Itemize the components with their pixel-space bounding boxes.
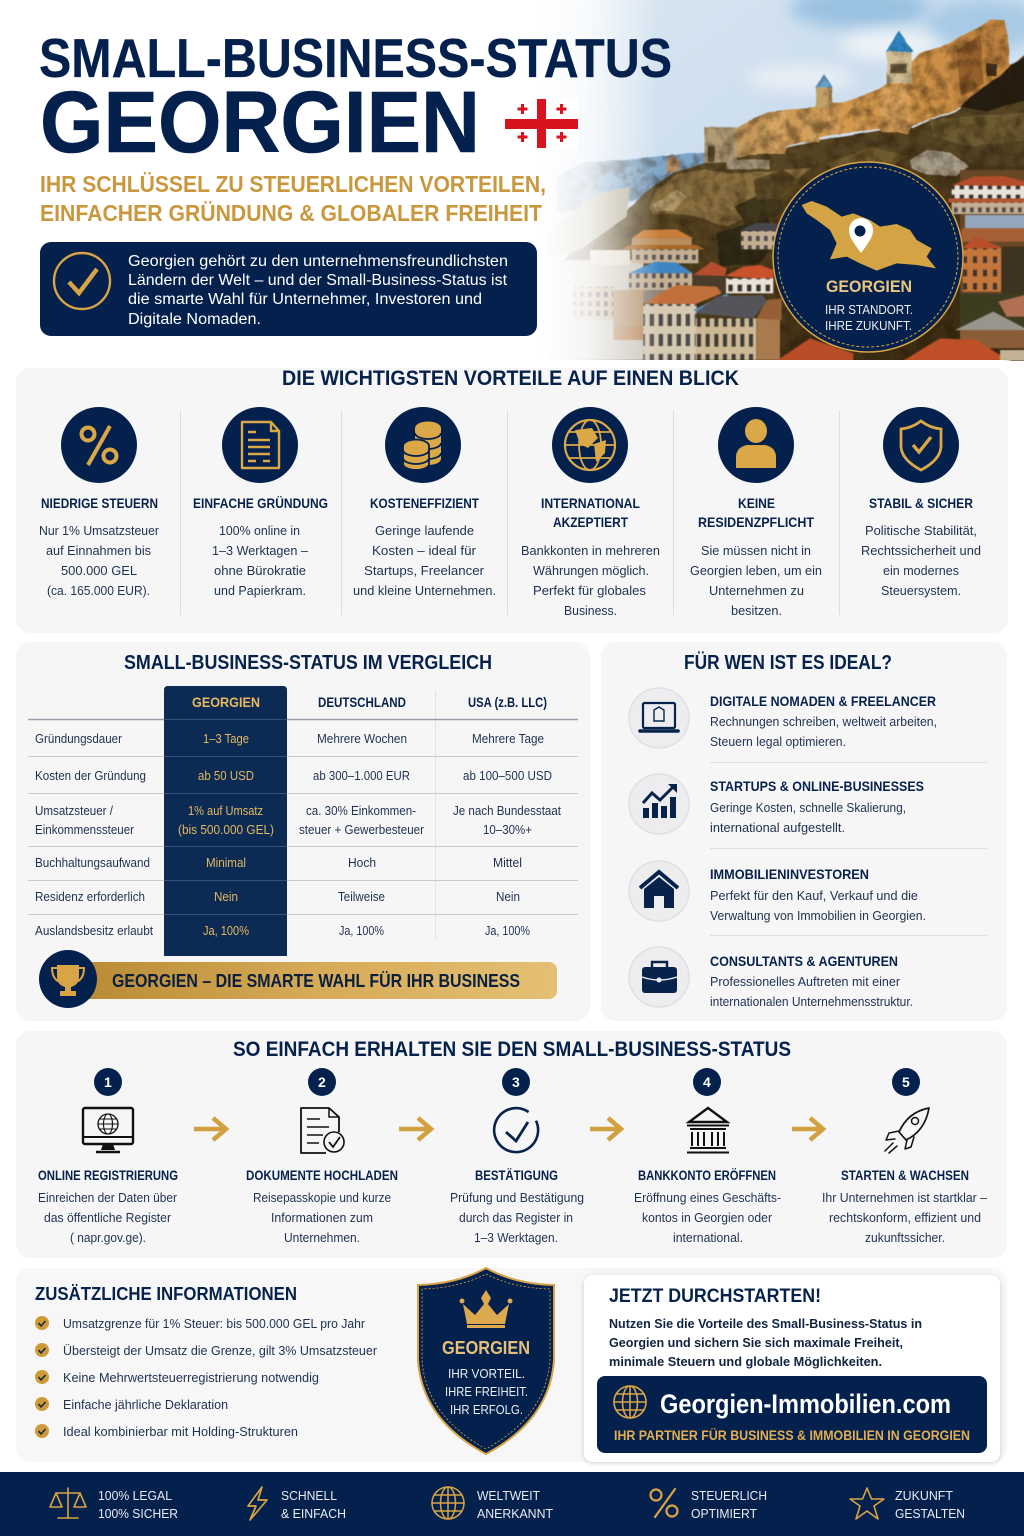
item: real estate investors: Verwaltung von Immobilien in Georgien.	[710, 908, 926, 923]
heading: advantages: DIE WICHTIGSTEN VORTEILE AUF EINEN BLICK	[282, 367, 739, 390]
item: stable and secure: Rechtssicherheit und	[861, 543, 981, 558]
column: USA: USA (z.B. LLC)	[468, 695, 547, 710]
item: consultants: CONSULTANTS & AGENTUREN	[710, 953, 898, 969]
icon: globe	[432, 1487, 464, 1519]
icon: map of Georgia with pin	[802, 201, 936, 271]
badge: shield: IHR VORTEIL.	[448, 1366, 525, 1381]
item: no residency	[690, 407, 822, 618]
step 5: STARTEN & WACHSEN	[841, 1168, 969, 1183]
number 1	[94, 1068, 122, 1096]
row labels: Residenz erforderlich	[35, 890, 145, 904]
row labels: Kosten der Gründung	[35, 769, 146, 783]
column: Deutschland: Hoch	[348, 856, 376, 870]
column: USA: Ja, 100%	[485, 924, 530, 938]
item: cost efficient: KOSTENEFFIZIENT	[370, 495, 479, 511]
footer item: legal: 100% SICHER	[98, 1506, 178, 1521]
badge: shield: IHRE FREIHEIT.	[445, 1384, 528, 1399]
panel: target audience	[601, 642, 1007, 1021]
banner: smart choice: GEORGIEN – DIE SMARTE WAHL FÜR IHR BUSINESS	[112, 971, 520, 991]
column: USA: 10–30%+	[483, 823, 532, 837]
footer item: legal	[50, 1488, 178, 1521]
item: stable and secure: Steuersystem.	[881, 583, 961, 598]
number 3	[502, 1068, 530, 1096]
step 2: Reisepasskopie und kurze	[253, 1191, 391, 1205]
item: no residency: RESIDENZPFLICHT	[698, 514, 814, 530]
item: internationally accepted	[521, 407, 660, 618]
badge: shield: GEORGIEN	[442, 1338, 530, 1358]
column: Georgien highlighted: Nein	[214, 889, 238, 904]
number 2	[308, 1068, 336, 1096]
badge: shield: IHR ERFOLG.	[450, 1402, 523, 1417]
title: GEORGIEN: GEORGIEN	[40, 74, 480, 171]
icon: circle check	[494, 1108, 538, 1152]
step 2	[246, 1068, 398, 1245]
item: consultants	[629, 947, 913, 1009]
row labels: Einkommenssteuer	[35, 823, 134, 837]
icon: Georgian flag	[505, 99, 578, 148]
badge: shield	[418, 1268, 554, 1454]
icon: monitor with globe	[83, 1108, 133, 1152]
column: USA: Nein	[496, 890, 520, 904]
column: USA	[453, 695, 561, 938]
panel: process steps	[16, 1031, 1007, 1258]
item: startups: STARTUPS & ONLINE-BUSINESSES	[710, 778, 924, 794]
fortress	[705, 20, 1010, 163]
icon: briefcase	[629, 947, 689, 1007]
call to action text: Nutzen Sie die Vorteile des Small-Business-Status in	[609, 1316, 922, 1331]
step 4	[634, 1068, 781, 1245]
icon: trophy	[39, 950, 97, 1008]
item: simple formation: ohne Bürokratie	[214, 563, 306, 578]
row labels	[35, 732, 153, 938]
step 5	[822, 1068, 987, 1245]
badge: Georgien map: IHR STANDORT.	[825, 303, 913, 317]
step 1: das öffentliche Register	[44, 1211, 171, 1225]
footer item: future: GESTALTEN	[895, 1506, 965, 1521]
card: call to action	[584, 1275, 1000, 1462]
step 4: BANKKONTO ERÖFFNEN	[638, 1168, 776, 1183]
step 4: Eröffnung eines Geschäfts-	[634, 1191, 781, 1205]
step 1: ONLINE REGISTRIERUNG	[38, 1168, 178, 1183]
number 5: 5	[902, 1074, 910, 1090]
icon: house	[629, 861, 689, 921]
intro text: Ländern der Welt – und der Small-Business-Status ist	[128, 272, 508, 289]
badge: Georgien map	[773, 162, 963, 352]
badge: Georgien map: IHRE ZUKUNFT.	[825, 319, 912, 333]
item: startups: international aufgestellt.	[710, 820, 845, 835]
step 1: Einreichen der Daten über	[38, 1191, 177, 1205]
intro text: Georgien gehört zu den unternehmensfreundlichsten	[128, 253, 508, 270]
arrow 3	[590, 1118, 621, 1140]
item: stable and secure	[861, 407, 981, 598]
footer item: worldwide	[432, 1487, 553, 1521]
item: internationally accepted: INTERNATIONAL	[541, 495, 640, 511]
column: Georgien highlighted: Minimal	[206, 855, 246, 870]
step 1	[38, 1068, 178, 1245]
item: cost efficient: Startups, Freelancer	[364, 563, 485, 578]
item: no residency: Georgien leben, um ein	[690, 563, 822, 578]
item: digital nomads: DIGITALE NOMADEN & FREELANCER	[710, 693, 936, 709]
item: no residency: KEINE	[738, 495, 775, 511]
column: Deutschland: DEUTSCHLAND	[318, 695, 406, 710]
item: no residency: Unternehmen zu	[709, 583, 804, 598]
call to action text: minimale Steuern und globale Möglichkeiten.	[609, 1354, 882, 1369]
number 2: 2	[318, 1074, 326, 1090]
item: consultants: Professionelles Auftreten mit einer	[710, 974, 901, 989]
step 2: Informationen zum	[271, 1211, 373, 1225]
item: internationally accepted: AKZEPTIERT	[553, 514, 628, 530]
heading: process: SO EINFACH ERHALTEN SIE DEN SMALL-BUSINESS-STATUS	[233, 1038, 791, 1061]
arrow 4	[792, 1118, 823, 1140]
item: digital nomads	[629, 688, 937, 749]
row labels: Gründungsdauer	[35, 732, 122, 746]
icon: laptop	[629, 688, 689, 748]
step 1: ( napr.gov.ge).	[70, 1231, 146, 1245]
column: Deutschland	[299, 695, 424, 938]
column: USA: ab 100–500 USD	[463, 769, 552, 783]
website box: Georgien-Immobilien.com	[660, 1389, 951, 1419]
item: stable and secure: Politische Stabilität,	[865, 523, 977, 538]
column: Deutschland: ab 300–1.000 EUR	[313, 769, 410, 783]
item: no residency: besitzen.	[731, 603, 782, 618]
column: Georgien highlighted	[164, 686, 287, 956]
website box: IHR PARTNER FÜR BUSINESS & IMMOBILIEN IN GEORGIEN	[614, 1428, 970, 1443]
step 5: zukunftssicher.	[865, 1231, 945, 1245]
call to action text: Georgien und sichern Sie sich maximale Freiheit,	[609, 1335, 903, 1350]
heading: comparison: SMALL-BUSINESS-STATUS IM VERGLEICH	[124, 652, 492, 674]
heading: call to action: JETZT DURCHSTARTEN!	[609, 1285, 821, 1307]
panel: comparison	[16, 642, 590, 1021]
step 3: BESTÄTIGUNG	[475, 1168, 558, 1183]
row labels: Auslandsbesitz erlaubt	[35, 924, 153, 938]
step 2: DOKUMENTE HOCHLADEN	[246, 1168, 398, 1183]
item: low taxes: (ca. 165.000 EUR).	[47, 583, 150, 598]
panel: advantages	[16, 367, 1008, 633]
item: stable and secure: ein modernes	[883, 563, 959, 578]
item: simple formation	[193, 407, 328, 598]
item: digital nomads: Rechnungen schreiben, weltweit arbeiten,	[710, 714, 937, 729]
item: low taxes: 500.000 GEL	[61, 563, 137, 578]
column: Deutschland: steuer + Gewerbesteuer	[299, 823, 424, 837]
badge: Georgien map: GEORGIEN	[826, 277, 912, 296]
step 4: kontos in Georgien oder	[642, 1211, 772, 1225]
icon: document with check	[301, 1108, 344, 1153]
heading: additional information: ZUSÄTZLICHE INFORMATIONEN	[35, 1284, 297, 1304]
list: additional information: Einfache jährliche Deklaration	[63, 1397, 228, 1412]
column: Georgien highlighted: (bis 500.000 GEL)	[178, 822, 274, 837]
item: cost efficient: Geringe laufende	[375, 523, 474, 538]
footer bar	[0, 1472, 1024, 1536]
call to action text	[609, 1316, 922, 1369]
icon: crown	[460, 1290, 512, 1328]
icon: document	[222, 407, 298, 483]
intro text: die smarte Wahl für Unternehmer, Investoren und	[128, 291, 482, 308]
table: comparison	[28, 686, 578, 956]
item: startups: Geringe Kosten, schnelle Skalierung,	[710, 800, 906, 815]
footer item: future	[850, 1488, 965, 1521]
item: real estate investors: Perfekt für den Kauf, Verkauf und die	[710, 888, 918, 903]
icon: check circle	[54, 253, 110, 309]
icon: percent	[650, 1489, 678, 1517]
footer item: legal: 100% LEGAL	[98, 1488, 172, 1503]
item: low taxes	[39, 407, 160, 598]
list: additional information: Umsatzgrenze für 1% Steuer: bis 500.000 GEL pro Jahr	[63, 1316, 366, 1331]
item: low taxes: auf Einnahmen bis	[46, 543, 151, 558]
arrow 2	[399, 1118, 431, 1140]
footer item: fast	[248, 1487, 346, 1521]
item: simple formation: und Papierkram.	[214, 583, 306, 598]
item: internationally accepted: Bankkonten in mehreren	[521, 543, 660, 558]
footer item: fast: SCHNELL	[281, 1488, 337, 1503]
step 4: international.	[673, 1231, 743, 1245]
item: low taxes: Nur 1% Umsatzsteuer	[39, 523, 160, 538]
icon: lightning	[248, 1487, 267, 1520]
number 3: 3	[512, 1074, 520, 1090]
arrow 1	[194, 1118, 226, 1140]
step 5: Ihr Unternehmen ist startklar –	[822, 1191, 987, 1205]
item: cost efficient	[353, 407, 496, 598]
item: digital nomads: Steuern legal optimieren.	[710, 734, 846, 749]
item: cost efficient: und kleine Unternehmen.	[353, 583, 496, 598]
number 4	[693, 1068, 721, 1096]
step 2: Unternehmen.	[284, 1231, 360, 1245]
heading: target audience: FÜR WEN IST ES IDEAL?	[684, 651, 892, 674]
item: real estate investors	[629, 861, 926, 923]
column: Georgien highlighted: Ja, 100%	[203, 923, 249, 938]
subtitle: IHR SCHLÜSSEL ZU STEUERLICHEN VORTEILEN,	[40, 171, 546, 197]
item: simple formation: 1–3 Werktagen –	[212, 543, 309, 558]
subtitle: EINFACHER GRÜNDUNG & GLOBALER FREIHEIT	[40, 200, 542, 226]
footer item: tax optimised	[650, 1488, 767, 1521]
white body background	[0, 360, 1024, 1536]
step 5: rechtskonform, effizient und	[829, 1211, 981, 1225]
number 5	[892, 1068, 920, 1096]
step 3	[450, 1068, 584, 1245]
item: real estate investors: IMMOBILIENINVESTOREN	[710, 866, 869, 882]
list: additional information: Keine Mehrwertsteuerregistrierung notwendig	[63, 1370, 319, 1385]
intro text: Digitale Nomaden.	[128, 311, 261, 328]
column: Georgien highlighted: 1% auf Umsatz	[188, 803, 263, 818]
column: Deutschland: ca. 30% Einkommen-	[306, 804, 416, 818]
item: simple formation: EINFACHE GRÜNDUNG	[193, 495, 328, 511]
icon: shield	[883, 407, 959, 483]
footer item: tax optimised: STEUERLICH	[691, 1488, 767, 1503]
item: internationally accepted: Währungen möglich.	[533, 563, 649, 578]
column: Deutschland: Ja, 100%	[339, 924, 384, 938]
town right	[960, 170, 1024, 297]
footer item: tax optimised: OPTIMIERT	[691, 1506, 757, 1521]
item: cost efficient: Kosten – ideal für	[372, 543, 477, 558]
town left, upper hazy area	[530, 187, 782, 361]
list: additional information: Ideal kombinierbar mit Holding-Strukturen	[63, 1424, 298, 1439]
icon: person	[718, 407, 794, 483]
column: Georgien highlighted: ab 50 USD	[198, 768, 254, 783]
intro text	[128, 253, 508, 328]
item: no residency: Sie müssen nicht in	[701, 543, 811, 558]
item: low taxes: NIEDRIGE STEUERN	[41, 495, 158, 511]
subtitle	[40, 171, 546, 226]
column: Georgien highlighted: 1–3 Tage	[203, 731, 249, 746]
icon: growth chart	[629, 774, 689, 834]
icon: star	[850, 1488, 884, 1519]
website box	[597, 1376, 987, 1453]
column: Deutschland: Mehrere Wochen	[317, 732, 407, 746]
row labels: Buchhaltungsaufwand	[35, 856, 150, 870]
column: Deutschland: Teilweise	[338, 890, 385, 904]
footer item: worldwide: ANERKANNT	[477, 1506, 553, 1521]
icon: bank	[687, 1108, 729, 1152]
item: simple formation: 100% online in	[219, 523, 300, 538]
step 3: 1–3 Werktagen.	[474, 1231, 558, 1245]
item: internationally accepted: Business.	[564, 603, 617, 618]
list: additional information	[35, 1316, 378, 1439]
icon: globe	[614, 1386, 646, 1418]
panel: additional information	[16, 1268, 1007, 1462]
icon: percent	[61, 407, 137, 483]
banner: smart choice	[39, 950, 557, 1008]
icon: scales	[50, 1488, 86, 1518]
column: Georgien highlighted: GEORGIEN	[192, 695, 260, 710]
footer item: worldwide: WELTWEIT	[477, 1488, 540, 1503]
item: consultants: internationalen Unternehmensstruktur.	[710, 994, 913, 1009]
item: stable and secure: STABIL & SICHER	[869, 495, 973, 511]
column: USA: Mehrere Tage	[472, 732, 544, 746]
list: additional information: Übersteigt der Umsatz die Grenze, gilt 3% Umsatzsteuer	[63, 1343, 378, 1358]
icon: coins	[385, 407, 461, 483]
number 4: 4	[703, 1074, 711, 1090]
item: startups	[629, 774, 924, 835]
step 3: Prüfung und Bestätigung	[450, 1191, 584, 1205]
item: internationally accepted: Perfekt für globales	[533, 583, 646, 598]
icon: rocket	[885, 1108, 929, 1153]
column: USA: Je nach Bundesstaat	[453, 804, 561, 818]
column: USA: Mittel	[493, 856, 522, 870]
row labels: Umsatzsteuer /	[35, 804, 113, 818]
icon: globe	[552, 407, 628, 483]
hero photo: Tbilisi fortress and old town	[557, 0, 1024, 361]
footer item: future: ZUKUNFT	[895, 1488, 953, 1503]
title: SMALL-BUSINESS-STATUS: SMALL-BUSINESS-STATUS	[39, 27, 672, 89]
footer item: fast: & EINFACH	[281, 1506, 346, 1521]
number 1: 1	[104, 1074, 112, 1090]
step 3: durch das Register in	[459, 1211, 573, 1225]
callout: intro	[40, 242, 537, 336]
